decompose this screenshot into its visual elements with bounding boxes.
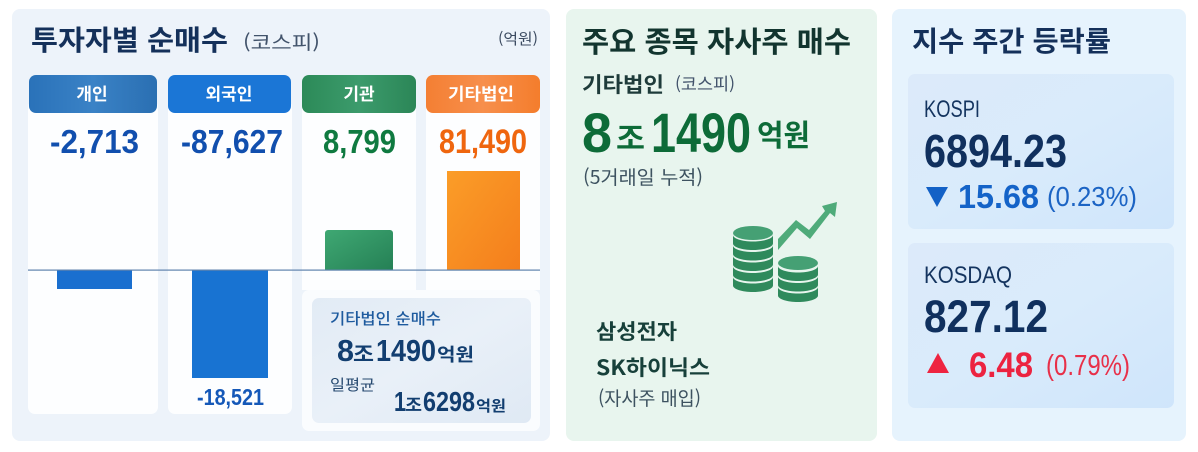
callout: other corporations summary: 억원 (476, 395, 506, 416)
column: institutions (302, 75, 416, 290)
big amount: 억원 (757, 111, 810, 155)
panel: treasury share purchases (566, 9, 877, 441)
callout: other corporations summary (302, 290, 540, 431)
callout: other corporations summary: 조 (353, 338, 374, 367)
icon: up triangle (927, 353, 949, 373)
subheading: other corporations: 기타법인 (582, 69, 664, 99)
card: KOSPI: 6894.23 (924, 125, 1067, 177)
company names: SK하이닉스 (596, 352, 710, 382)
bar: other corporations (447, 171, 520, 270)
period note: (5거래일 누적) (583, 163, 703, 190)
card: KOSDAQ: (0.79%) (1046, 350, 1130, 382)
callout: other corporations summary: 1 (394, 386, 406, 417)
column: individuals: 개인 (76, 80, 108, 105)
card: KOSDAQ: 827.12 (924, 291, 1048, 342)
heading: weekly index change: 지수 주간 등락률 (912, 20, 1111, 60)
company names (596, 316, 710, 382)
big amount: 1490 (651, 101, 751, 164)
column: individuals: -2,713 (50, 123, 139, 160)
callout: other corporations summary: 억원 (437, 341, 474, 367)
icon: coin stacks with rising arrow (733, 202, 837, 302)
callout: other corporations summary: 6298 (423, 386, 475, 417)
card: KOSDAQ (908, 243, 1174, 408)
column: institutions: 8,799 (323, 123, 396, 160)
icon: down triangle (926, 187, 948, 207)
callout: other corporations summary: 조 (405, 391, 422, 416)
heading: treasury share purchases: 주요 종목 자사주 매수 (582, 19, 851, 61)
column: individuals (28, 75, 158, 414)
card: KOSPI: (0.23%) (1047, 181, 1137, 212)
market label: KOSPI: (코스피) (243, 28, 320, 55)
bar: individuals (57, 270, 132, 289)
big amount: 8 (582, 101, 612, 164)
column: other corporations: 기타법인 (448, 80, 514, 105)
callout: other corporations summary: 8 (337, 333, 354, 368)
big amount: 조 (616, 114, 645, 158)
company names: 삼성전자 (596, 316, 677, 346)
column: foreigners: 외국인 (206, 80, 252, 105)
card: KOSPI (908, 74, 1174, 229)
bar: institutions (325, 230, 393, 270)
column: foreigners (168, 75, 292, 414)
card: KOSPI: KOSPI (924, 96, 980, 123)
callout: other corporations summary: 기타법인 순매수 (330, 307, 441, 329)
card: KOSDAQ: 6.48 (969, 346, 1033, 385)
callout: other corporations summary: 일평균 (330, 374, 375, 395)
column: foreigners: -87,627 (181, 123, 283, 160)
foreign bar value: -18,521 (197, 384, 264, 410)
market label: (코스피) (675, 70, 735, 95)
callout: other corporations summary: 1490 (376, 333, 436, 368)
panel: weekly index change (892, 9, 1186, 441)
panel: investor net buying (12, 9, 550, 441)
column: other corporations (426, 75, 540, 290)
card: KOSDAQ: KOSDAQ (924, 262, 1012, 289)
heading: investor net buying: 투자자별 순매수 (31, 19, 228, 59)
card: KOSPI: 15.68 (958, 178, 1039, 215)
bar: foreigners (192, 270, 268, 378)
big amount (582, 101, 810, 164)
purchase note: (자사주 매입) (598, 384, 701, 411)
column: institutions: 기관 (343, 80, 375, 105)
zero axis (28, 270, 540, 271)
column: other corporations: 81,490 (439, 123, 527, 161)
unit label: (억원) (498, 28, 538, 49)
